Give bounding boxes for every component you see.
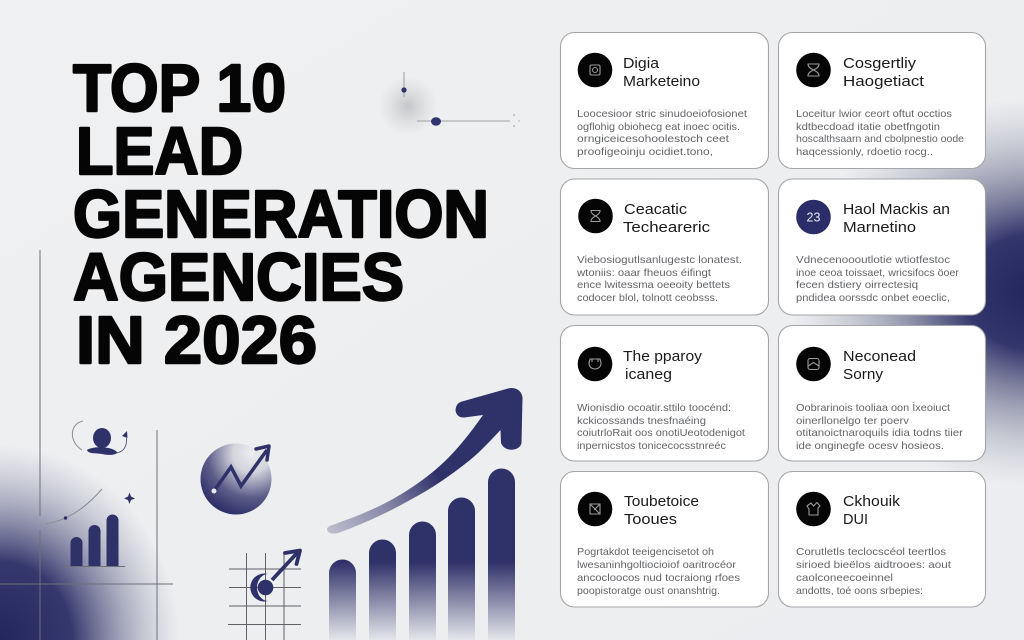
card 4 body: Vdnecenoooutlotie wtiotfestoc (796, 254, 950, 266)
card 8 body: andotts, toé oons srbepies: (796, 585, 923, 597)
card 1 body: ogflohig obiohecg eat inoec ocitis. (577, 121, 740, 133)
small bar chart (64, 514, 125, 566)
card 8 heading (843, 493, 901, 528)
title: GENERATION (73, 177, 489, 252)
card 1 heading: Digia (623, 55, 660, 72)
card 2 heading: Cosgertliy (843, 55, 917, 72)
card 8 heading: Ckhouik (843, 493, 901, 510)
card 7 body: Pogrtakdot teeigencisetot oh (577, 546, 714, 558)
card 6 heading (843, 348, 916, 383)
icon: card 3 badge (578, 199, 613, 233)
card 5 body (577, 402, 745, 452)
title: LEAD (76, 114, 243, 189)
card 7 body (577, 546, 740, 597)
card 4 heading: Marnetino (843, 219, 916, 236)
card 3 body: Viebosiogutlsanlugestc lonatest. (577, 254, 742, 266)
card 4 body: fecen dstiery oirrectesiq (796, 279, 918, 291)
grid lines: left (0, 250, 173, 640)
card 3 body: wtoniis: oaar fheuos éifingt (576, 267, 711, 279)
panel: card 7 (560, 472, 768, 607)
card 8 body (796, 546, 951, 597)
card 8 body: caolconeecoeinnel (796, 572, 893, 584)
card 2 heading: Haogetiact (843, 73, 925, 90)
card 3 body (576, 254, 742, 304)
card 4 heading (843, 201, 950, 236)
card 7 heading (624, 493, 699, 528)
card 3 body: ence lwitessma oeeoity bettets (577, 279, 730, 291)
card 5 body: kckicossands tnesfnaéing (577, 415, 706, 427)
card 8 body: sirioed bieëlos aidtrooes: aout (796, 559, 951, 571)
card 7 heading: Tooues (624, 511, 677, 528)
card 1 heading: Marketeino (623, 73, 700, 90)
card 2 body (796, 108, 964, 158)
card 5 heading (623, 348, 703, 383)
title: AGENCIES (73, 240, 404, 315)
card 5 body: Wionisdio ocoatir.sttilo toocénd: (577, 402, 731, 414)
card 3 heading (623, 201, 711, 236)
card 2 body: haqcessionly, rdoetio rocg.. (796, 146, 933, 158)
card 2 heading (843, 55, 925, 90)
panel: card 3 (560, 179, 768, 315)
icon: card 5 badge (578, 347, 612, 381)
card 1 body (577, 108, 747, 158)
card 2 body: Loceitur lwior ceort oftut occtios (796, 108, 952, 120)
icon: card 6 badge (796, 347, 831, 381)
icon: card 1 badge (578, 53, 612, 87)
big bar chart (329, 468, 515, 640)
card 3 body: codocer blol, tolnott ceobsss. (577, 292, 718, 304)
big growth arrow (327, 388, 522, 534)
card 5 heading: The pparoy (623, 348, 703, 365)
card 7 heading: Toubetoice (624, 493, 699, 510)
card 8 heading: DUI (843, 511, 868, 528)
card 1 body: proofigeoinju ocidiet.tono, (577, 146, 713, 158)
title: TOP 10 (73, 51, 286, 126)
card 6 heading: Neconead (843, 348, 916, 365)
icon: card 8 badge (796, 492, 831, 526)
card 8 body: Corutletls teclocscéol teertlos (796, 546, 946, 558)
panel: card 4 (778, 179, 986, 315)
card 5 body: coiutrloRait oos onotiUeotodenigot (577, 427, 745, 439)
card 1 heading (623, 55, 700, 90)
card 6 body: ide onginegfe ocesv hosieos. (796, 440, 944, 452)
icon: person with orbit arrow (72, 421, 128, 455)
panel: card 5 (560, 326, 768, 461)
card 5 heading: icaneg (625, 366, 672, 383)
card 1 body: Loocesioor stric sinudoeiofosionet (577, 108, 747, 120)
card 7 body: poopistoratge oust onanshtrig. (577, 585, 720, 597)
icon: growth globe (200, 444, 272, 514)
card 7 body: ancocloocos nud tocraiong rfoes (577, 572, 740, 584)
icon: target on grid (228, 550, 301, 640)
panel: card 6 (778, 326, 986, 461)
card 2 body: hoscalthsaarn and cbolpnestio oode (796, 133, 964, 145)
card 6 heading: Sorny (843, 366, 884, 383)
icon: card 7 badge (578, 492, 612, 526)
card 4 body (796, 254, 960, 304)
icon: small curve with sparkle (45, 489, 135, 524)
card 3 heading: Ceacatic (624, 201, 688, 218)
card 6 body: oinerllonelgo ter poerv (796, 415, 910, 427)
card 1 body: orngiceicesohoolestoch ceet (577, 133, 729, 145)
decorative nodes: top (401, 72, 520, 127)
card 5 body: inpernicstos tonicecocsstnreéc (577, 440, 726, 452)
card 6 body (796, 401, 964, 452)
card 4 heading: Haol Mackis an (843, 201, 950, 218)
card 7 body: lwesaninhgoltiocioiof oaritrocéor (577, 559, 737, 571)
panel: card 8 (778, 472, 986, 607)
title: IN 2026 (76, 303, 317, 378)
card 3 heading: Techeareric (623, 219, 711, 236)
title (73, 51, 489, 378)
card 4 body: inoe ceoa toissaet, wricsifocs öoer (796, 267, 960, 279)
card 2 body: kdtbecdoad itatie obetfngotin (796, 121, 940, 133)
card 6 body: otitanoictnaroquils idia todns tiier (796, 427, 964, 439)
panel: card 2 (778, 32, 986, 168)
icon: card 4 number badge: 23 (807, 210, 820, 224)
card 4 body: pndidea oorssdc onbet eoeclic, (796, 292, 950, 304)
icon: card 2 badge (796, 53, 831, 87)
panel: card 1 (560, 32, 768, 168)
icon: card 4 number badge (796, 200, 831, 234)
card 6 body: Oobrarinois tooliaa oon Ìxeoiuct (796, 401, 950, 414)
